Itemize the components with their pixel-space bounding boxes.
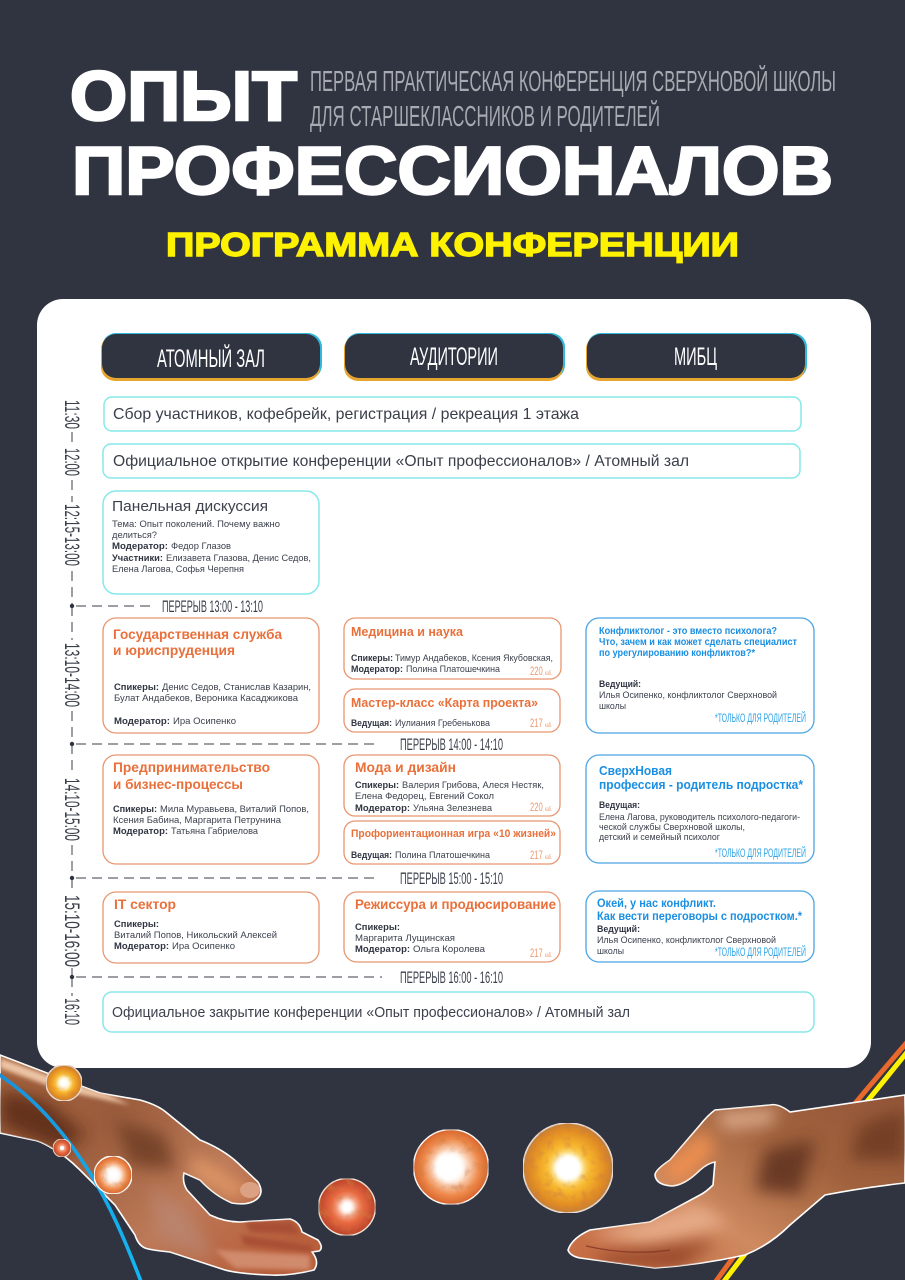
title: ОПЫТ	[70, 57, 297, 135]
card: negotiating with a teenager: Окей, у нас конфликт.	[597, 898, 716, 910]
row: opening: Официальное открытие конференции «Опыт профессионалов» / Атомный зал	[113, 453, 689, 470]
card: IT sector: Спикеры:	[114, 919, 159, 930]
card: medicine and science: 220 каб.	[530, 664, 552, 678]
card: project map workshop: Иулиания Гребенькова	[395, 718, 491, 729]
card: project map workshop: Ведущая:	[351, 718, 392, 729]
icon: energy orb 6	[523, 1123, 613, 1213]
timeline: time axis: 12:15-13:00	[60, 504, 83, 566]
card: directing and producing: Ольга Королева	[413, 944, 486, 955]
card: fashion and design: Ульяна Зелезнева	[413, 803, 493, 814]
card: career game	[344, 821, 560, 864]
card: fashion and design: Елена Федорец, Евгений Сокол	[355, 791, 494, 802]
icon: energy orb 1	[46, 1065, 82, 1101]
card: negotiating with a teenager: Илья Осипенко, конфликтолог Сверхновой	[597, 935, 776, 946]
title	[70, 57, 833, 209]
card: career game: Профориентационная игра «10 жизней»	[351, 828, 556, 840]
card: negotiating with a teenager: Ведущий:	[597, 924, 640, 935]
icon: energy orb 4	[318, 1178, 376, 1236]
card: panel discussion: Модератор:	[112, 541, 168, 552]
timeline: time axis: 12:00	[60, 448, 83, 476]
card: conflict specialist: Что, зачем и как может сделать специалист	[599, 637, 797, 648]
card: directing and producing: Режиссура и продюсирование	[355, 897, 556, 912]
card: panel discussion: Панельная дискуссия	[112, 498, 268, 515]
column header: МИБЦ	[586, 333, 807, 381]
card: entrepreneurship: Мила Муравьева, Виталий Попов,	[160, 804, 309, 815]
card: medicine and science: Тимур Андабеков, Ксения Якубовская,	[395, 653, 553, 664]
break 16:00: ПЕРЕРЫВ 16:00 - 16:10	[400, 968, 503, 987]
card: career game: 217 каб.	[530, 848, 552, 862]
card: fashion and design	[344, 755, 560, 816]
subtitle: ДЛЯ СТАРШЕКЛАССНИКОВ И РОДИТЕЛЕЙ	[310, 99, 660, 133]
card: project map workshop: 217 каб.	[530, 716, 552, 730]
card: fashion and design: Спикеры:	[355, 780, 399, 791]
heading: programme: ПРОГРАММА КОНФЕРЕНЦИИ	[166, 226, 739, 263]
card: conflict specialist: Ведущий:	[599, 679, 641, 690]
card: medicine and science: Спикеры:	[351, 653, 393, 664]
column header: Аудитории	[344, 333, 565, 381]
column header: МИБЦ: МИБЦ	[674, 343, 717, 371]
card: supernova parent: профессия - родитель подростка*	[599, 778, 803, 792]
card: fashion and design: Мода и дизайн	[355, 760, 456, 775]
card: conflict specialist	[586, 618, 814, 733]
card: directing and producing	[344, 892, 560, 962]
card: entrepreneurship: Ксения Бабина, Маргарита Петрунина	[113, 815, 282, 826]
card: supernova parent: Елена Лагова, руководитель психолого-педагоги-	[599, 812, 800, 823]
card: public service and law: и юриспруденция	[113, 643, 235, 658]
card: conflict specialist: Конфликтолог - это вместо психолога?	[599, 625, 777, 637]
panel: schedule background	[37, 299, 871, 1068]
timeline: time axis: 11:30	[60, 400, 83, 429]
card: IT sector	[103, 892, 319, 963]
card: conflict specialist: Илья Осипенко, конфликтолог Сверхновой	[599, 690, 777, 701]
timeline: time axis	[60, 400, 83, 1025]
card: conflict specialist: *ТОЛЬКО ДЛЯ РОДИТЕЛЕЙ	[715, 710, 806, 725]
timeline: time axis: 14:10-15:00	[60, 778, 83, 841]
card: entrepreneurship: и бизнес-процессы	[113, 777, 243, 792]
card: IT sector: Модератор:	[114, 941, 169, 952]
card: supernova parent: детский и семейный психолог	[599, 832, 720, 843]
icon: energy orb 3	[94, 1156, 132, 1194]
card: project map workshop: Мастер-класс «Карта проекта»	[351, 696, 538, 710]
column header: Аудитории: АУДИТОРИИ	[410, 343, 498, 371]
card: project map workshop	[344, 689, 560, 732]
card: panel discussion	[103, 491, 319, 594]
card: fashion and design: Валерия Грибова, Алеся Нестяк,	[402, 780, 544, 791]
card: panel discussion: Тема: Опыт поколений. Почему важно	[112, 519, 280, 530]
card: panel discussion: Елизавета Глазова, Денис Седов,	[166, 553, 311, 564]
column header: Атомный зал	[101, 333, 322, 381]
card: supernova parent: Ведущая:	[599, 800, 640, 811]
break 14:00: ПЕРЕРЫВ 14:00 - 14:10	[400, 735, 503, 754]
card: medicine and science: Медицина и наука	[351, 625, 464, 639]
card: career game: Ведущая:	[351, 850, 392, 861]
card: career game: Полина Платошечкина	[395, 850, 491, 861]
card: public service and law: Ира Осипенко	[173, 716, 236, 727]
row: closing: Официальное закрытие конференции «Опыт профессионалов» / Атомный зал	[112, 1004, 630, 1021]
card: medicine and science	[344, 618, 561, 679]
decorative stripe: blue	[0, 1074, 142, 1280]
card: IT sector: IT сектор	[114, 897, 176, 912]
card: public service and law: Денис Седов, Станислав Казарин,	[162, 682, 311, 693]
card: supernova parent: *ТОЛЬКО ДЛЯ РОДИТЕЛЕЙ	[715, 845, 806, 860]
card: conflict specialist: школы	[599, 701, 626, 712]
card: supernova parent	[586, 755, 814, 863]
break 13:00: ПЕРЕРЫВ 13:00 - 13:10	[162, 597, 263, 616]
card: negotiating with a teenager: Как вести переговоры с подростком.*	[597, 911, 802, 923]
card: medicine and science: Модератор:	[351, 664, 403, 675]
timeline: time axis: 16:10	[60, 998, 83, 1025]
column header: Атомный зал: АТОМНЫЙ ЗАЛ	[157, 343, 265, 373]
card: panel discussion: Федор Глазов	[171, 541, 231, 552]
card: entrepreneurship: Модератор:	[113, 826, 168, 837]
card: conflict specialist: по урегулированию конфликтов?*	[599, 647, 755, 659]
card: negotiating with a teenager: *ТОЛЬКО ДЛЯ РОДИТЕЛЕЙ	[715, 944, 806, 959]
card: public service and law: Булат Андабеков, Вероника Касаджикова	[114, 693, 299, 704]
card: panel discussion: делиться?	[112, 530, 157, 541]
card: medicine and science: Полина Платошечкина	[406, 664, 501, 675]
row: closing	[103, 992, 814, 1032]
timeline: time axis: 13:10-14:00	[60, 643, 83, 707]
card: public service and law: Государственная служба	[113, 627, 282, 642]
card: IT sector: Ира Осипенко	[172, 941, 235, 952]
icon: energy orb 5	[414, 1130, 488, 1204]
card: directing and producing: Спикеры:	[355, 922, 400, 933]
card: entrepreneurship: Спикеры:	[113, 804, 157, 815]
illustration: left hand	[0, 1055, 321, 1275]
subtitle	[310, 64, 836, 133]
card: supernova parent: ческой службы Сверхновой школы,	[599, 822, 745, 833]
card: public service and law: Спикеры:	[114, 682, 159, 693]
card: panel discussion: Елена Лагова, Софья Черепня	[112, 564, 244, 575]
card: fashion and design: Модератор:	[355, 803, 410, 814]
card: negotiating with a teenager	[586, 891, 814, 962]
card: entrepreneurship: Татьяна Габриелова	[171, 826, 259, 837]
card: entrepreneurship: Предпринимательство	[113, 760, 270, 775]
timeline: time axis: 15:10-16:00	[60, 895, 83, 967]
card: fashion and design: 220 каб.	[530, 800, 552, 814]
icon: energy orb 2	[53, 1139, 71, 1157]
card: panel discussion: Участники:	[112, 553, 163, 564]
row: opening	[103, 444, 800, 478]
card: directing and producing: 217 каб.	[530, 946, 552, 960]
card: entrepreneurship	[103, 755, 319, 864]
card: IT sector: Виталий Попов, Никольский Алексей	[114, 930, 277, 941]
row: registration: Сбор участников, кофебрейк, регистрация / рекреация 1 этажа	[113, 406, 579, 423]
card: supernova parent: СверхНовая	[599, 764, 672, 778]
card: public service and law	[103, 618, 319, 733]
illustration: right hand	[568, 1095, 905, 1268]
row: registration	[104, 397, 801, 431]
break 15:00: ПЕРЕРЫВ 15:00 - 15:10	[400, 869, 503, 888]
decorative stripes: orange and yellow	[714, 1040, 905, 1280]
card: public service and law: Модератор:	[114, 716, 170, 727]
card: negotiating with a teenager: школы	[597, 946, 624, 957]
title: ПРОФЕССИОНАЛОВ	[72, 133, 833, 209]
card: directing and producing: Маргарита Лущинская	[355, 933, 455, 944]
card: directing and producing: Модератор:	[355, 944, 410, 955]
